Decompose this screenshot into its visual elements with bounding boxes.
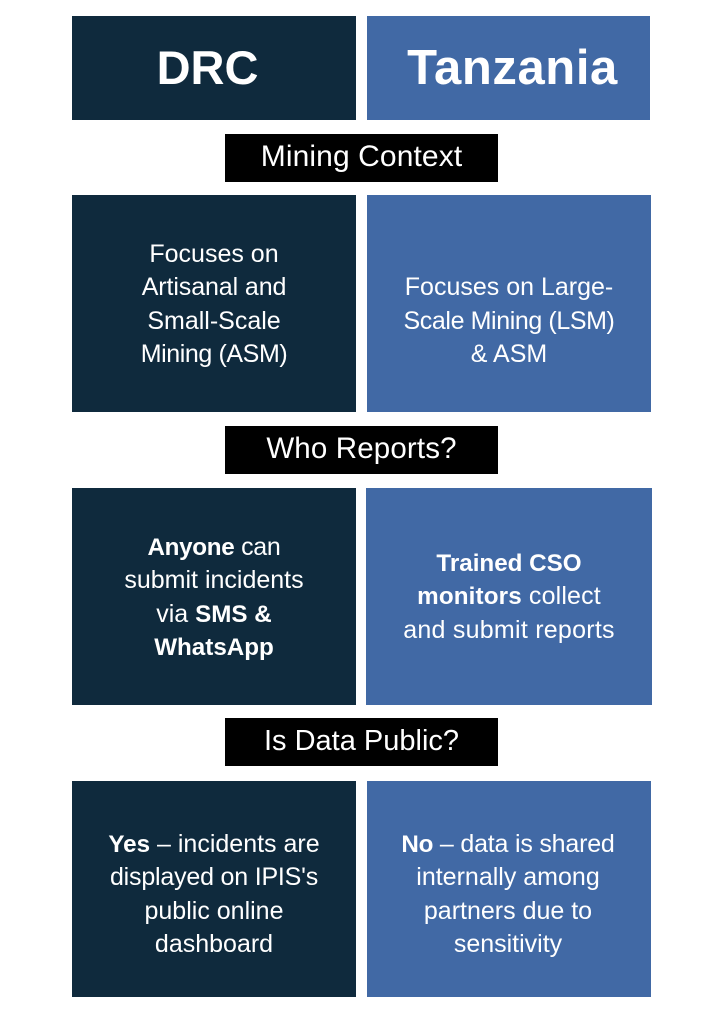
panel: Tanzania data public: partners due to	[424, 897, 592, 925]
panel: Tanzania who reports: Trained CSO	[436, 550, 582, 577]
panel: Tanzania data public	[367, 781, 651, 997]
section label: Is Data Public?	[225, 718, 498, 766]
panel: Tanzania who reports	[366, 488, 652, 705]
section label: Mining Context	[225, 134, 498, 182]
panel: Tanzania mining context	[367, 195, 651, 412]
section label: Is Data Public?: Is Data Public?	[264, 725, 459, 757]
panel: DRC who reports	[72, 488, 356, 705]
panel: DRC who reports: submit incidents	[124, 566, 304, 594]
panel: DRC data public: dashboard	[155, 930, 273, 958]
panel: Tanzania who reports: monitors collect	[417, 582, 601, 610]
panel: Tanzania data public: No – data is shared	[401, 830, 615, 858]
section label: Who Reports?	[225, 426, 498, 474]
panel: Tanzania data public: sensitivity	[454, 930, 562, 958]
section label: Who Reports?: Who Reports?	[266, 432, 457, 465]
panel: DRC who reports: via SMS &	[156, 600, 272, 628]
header: DRC	[72, 16, 356, 120]
panel: DRC who reports: WhatsApp	[154, 634, 274, 661]
panel: DRC who reports: Anyone can	[148, 533, 280, 561]
panel: DRC mining context: Artisanal and	[142, 273, 286, 301]
panel: DRC mining context: Mining (ASM)	[141, 340, 287, 368]
header: DRC: DRC	[157, 41, 258, 94]
panel: DRC data public: public online	[144, 897, 284, 925]
panel: DRC data public	[72, 781, 356, 997]
header: Tanzania	[367, 16, 650, 120]
panel: Tanzania data public: internally among	[416, 863, 600, 891]
panel: Tanzania mining context: Focuses on Large-	[405, 273, 613, 301]
panel: Tanzania mining context: & ASM	[471, 340, 547, 368]
panel: Tanzania mining context: Scale Mining (LSM)	[404, 307, 614, 335]
section label: Mining Context: Mining Context	[261, 140, 462, 173]
panel: DRC data public: Yes – incidents are	[108, 830, 320, 858]
header: Tanzania: Tanzania	[407, 41, 618, 95]
panel: DRC mining context	[72, 195, 356, 412]
panel: Tanzania who reports: and submit reports	[403, 616, 615, 644]
panel: DRC data public: displayed on IPIS's	[110, 863, 318, 891]
panel: DRC mining context: Small-Scale	[147, 307, 281, 335]
panel: DRC mining context: Focuses on	[149, 240, 279, 268]
